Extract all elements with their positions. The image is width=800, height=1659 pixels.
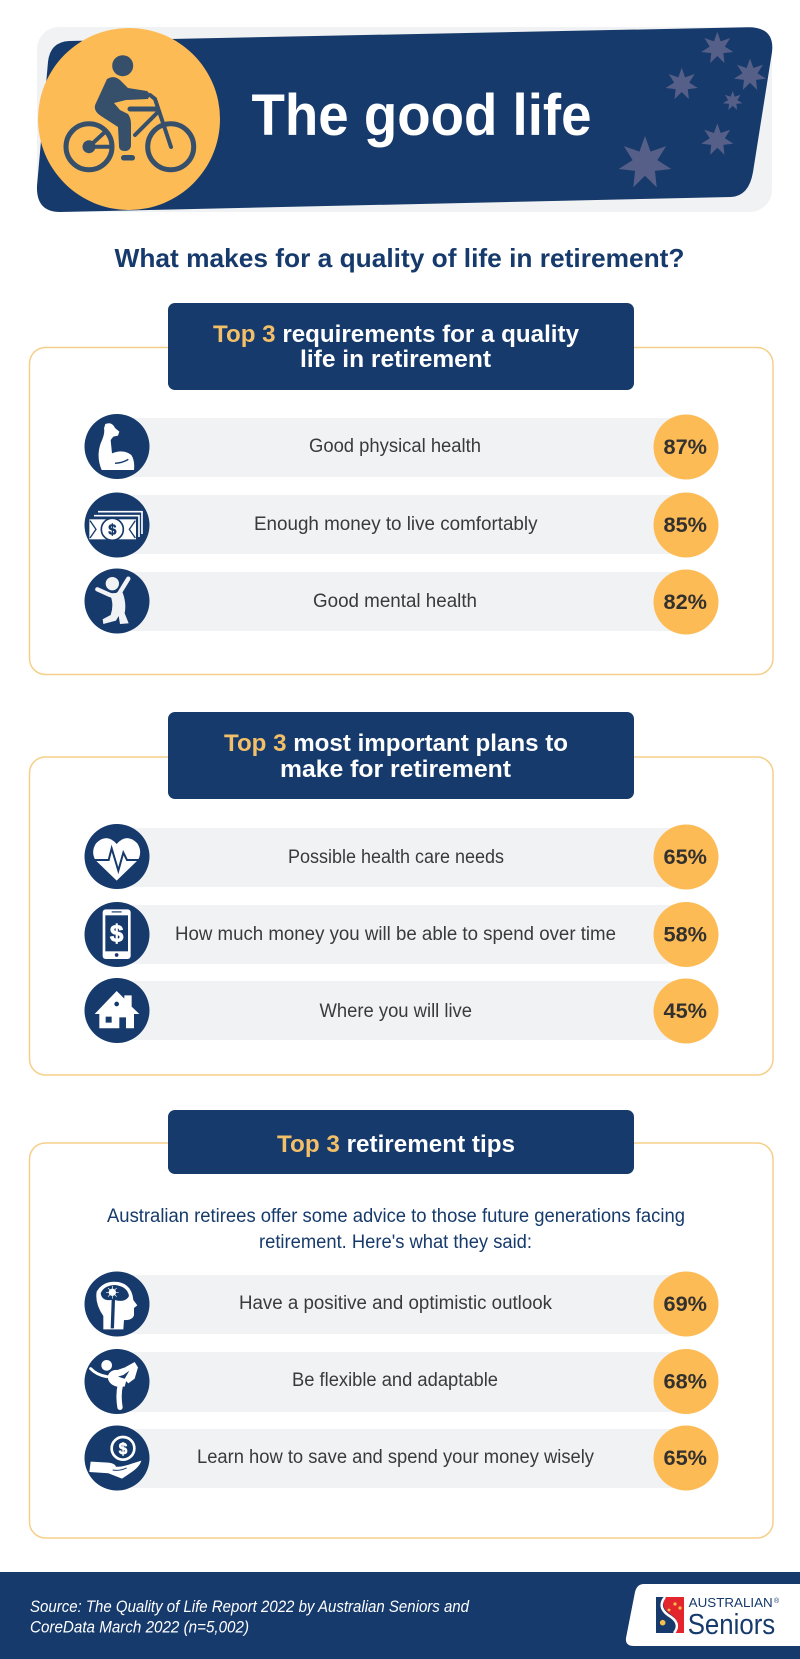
panel heading: Top 3 requirements for a quality: [213, 321, 580, 348]
icon: yoga pose: [91, 1360, 138, 1407]
percent: 45%: [664, 1000, 707, 1023]
logo: Australian Seniors: Seniors: [688, 1609, 775, 1641]
icon: cyclist in yellow circle: [38, 28, 220, 210]
row: good mental health: [84, 568, 718, 634]
panel: top 3 tips: [30, 1110, 773, 1538]
label: Good mental health: [313, 591, 477, 612]
row: enough money: [84, 492, 718, 558]
icon: jumping person: [97, 577, 129, 624]
percent: [654, 824, 718, 890]
intro text: retirement. Here's what they said:: [259, 1232, 532, 1253]
percent: 68%: [664, 1370, 707, 1394]
percent: 65%: [664, 1447, 707, 1470]
label: Possible health care needs: [288, 847, 504, 868]
panel heading: [168, 1110, 634, 1174]
footer bar: [0, 1572, 800, 1659]
panel heading: Top 3 retirement tips: [277, 1131, 515, 1158]
icon: hand holding coin: $: [119, 1441, 128, 1458]
percent: [654, 492, 718, 558]
source note: CoreData March 2022 (n=5,002): [30, 1618, 249, 1636]
subtitle: What makes for a quality of life in retirement?: [114, 243, 684, 273]
panel heading: life in retirement: [300, 346, 491, 373]
percent: [654, 1272, 718, 1336]
logo: Australian Seniors: [626, 1584, 800, 1646]
row: where you will live: [84, 978, 718, 1044]
source note: Source: The Quality of Life Report 2022 by Australian Seniors and: [30, 1598, 470, 1616]
label: Enough money to live comfortably: [254, 514, 538, 535]
percent: [654, 1426, 718, 1490]
percent: [654, 570, 718, 634]
row: flexible and adaptable: [84, 1349, 718, 1414]
logo: Australian Seniors: ®: [774, 1597, 780, 1605]
percent: 65%: [664, 846, 707, 869]
intro text: [107, 1206, 685, 1253]
source note: [30, 1598, 470, 1636]
label: Have a positive and optimistic outlook: [239, 1293, 552, 1314]
icon: house: [95, 991, 139, 1028]
panel heading: Top 3 most important plans to: [224, 730, 568, 757]
percent: 87%: [664, 436, 707, 459]
label: How much money you will be able to spend over time: [175, 924, 616, 945]
percent: 58%: [664, 924, 707, 946]
row: good physical health: [84, 414, 718, 480]
row: positive outlook: [84, 1272, 718, 1336]
percent: 69%: [664, 1293, 707, 1316]
row: money over time: [84, 902, 718, 967]
header banner: [37, 27, 772, 212]
row: save and spend wisely: [84, 1426, 718, 1490]
percent: [654, 978, 718, 1044]
label: Be flexible and adaptable: [292, 1370, 498, 1391]
icon: hand holding coin: [89, 1437, 141, 1479]
icon: flexed arm: [99, 423, 134, 470]
stars: [619, 32, 766, 187]
panel heading: [168, 712, 634, 799]
percent: 85%: [664, 514, 707, 537]
icon: phone with dollar: $: [110, 920, 123, 947]
percent: 82%: [664, 591, 707, 614]
label: Learn how to save and spend your money wisely: [197, 1447, 594, 1468]
icon: banknotes: $: [108, 523, 116, 539]
panel: top 3 requirements: [30, 303, 773, 674]
percent: [654, 414, 718, 480]
intro text: Australian retirees offer some advice to those future generations facing: [107, 1206, 685, 1227]
icon: banknotes: [89, 512, 142, 540]
percent: [654, 902, 718, 967]
icon: heart with pulse: [93, 838, 140, 881]
panel heading: [168, 303, 634, 390]
title: The good life: [252, 83, 592, 148]
label: Good physical health: [309, 436, 481, 457]
row: health care needs: [84, 824, 718, 890]
percent: [654, 1349, 718, 1414]
logo: Australian Seniors: AUSTRALIAN: [689, 1595, 773, 1610]
panel: top 3 plans: [30, 712, 773, 1075]
label: Where you will live: [320, 1001, 472, 1022]
panel heading: make for retirement: [280, 756, 511, 783]
icon: phone with dollar: [103, 909, 131, 959]
icon: head with brain: [96, 1282, 137, 1329]
